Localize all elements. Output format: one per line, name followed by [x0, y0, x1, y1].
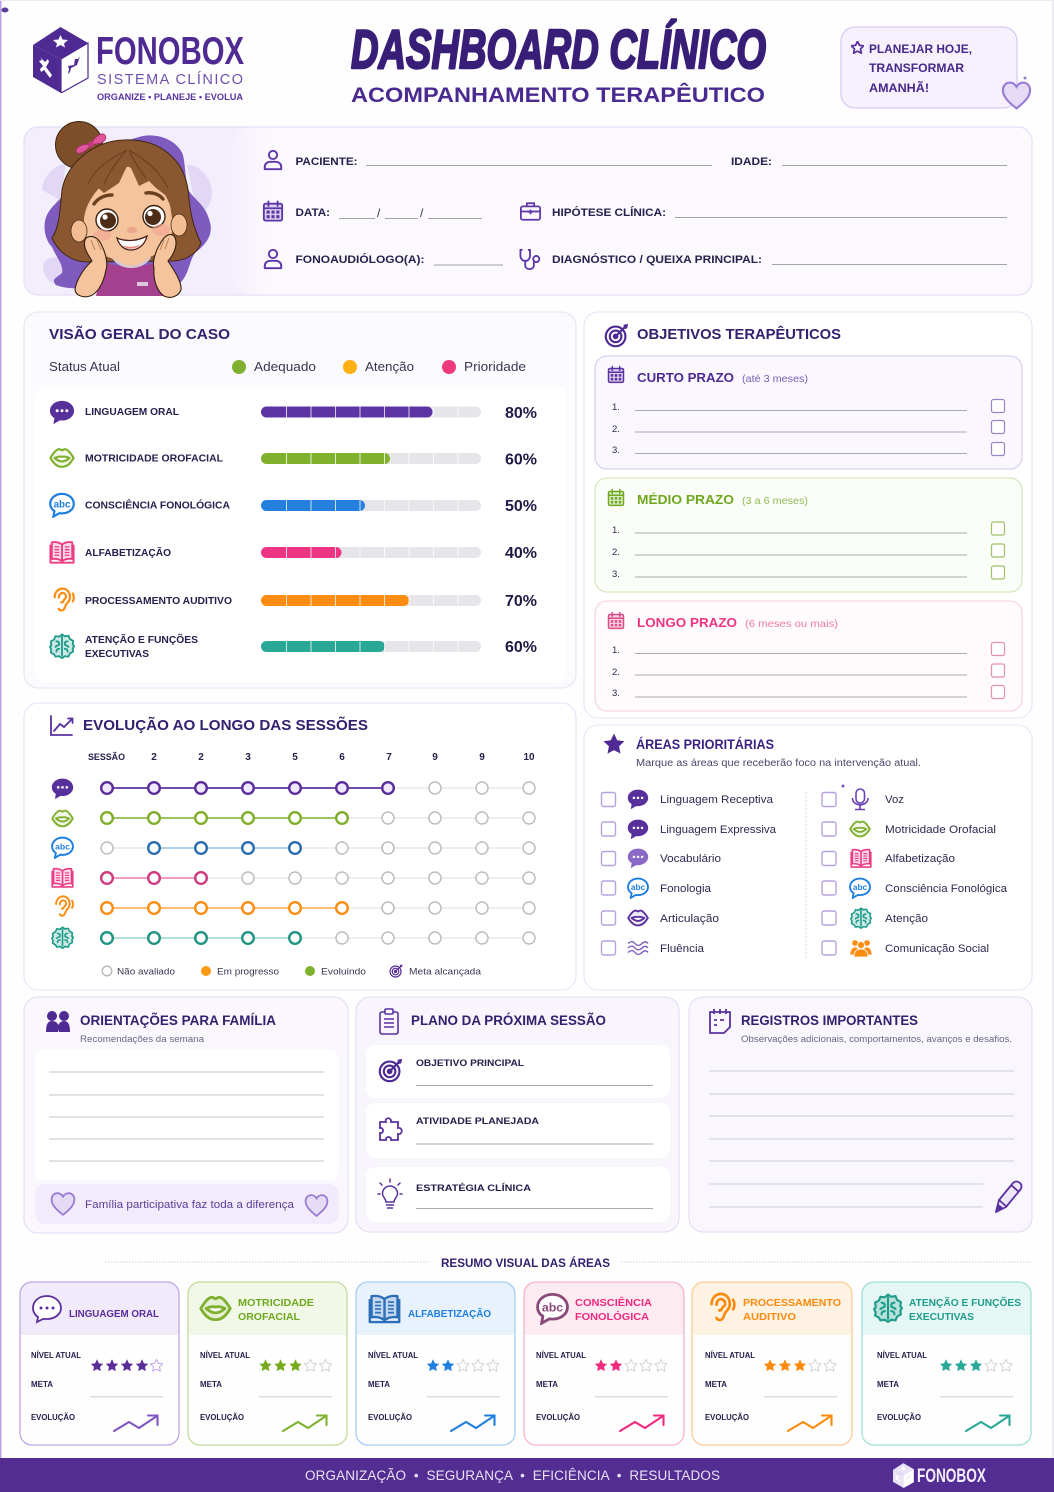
list: right column: Voz [885, 794, 904, 806]
card: motricidade orofacial: EVOLUÇÃO [200, 1413, 244, 1422]
legend: session status: Em progresso [217, 966, 279, 978]
row icons [52, 779, 73, 948]
logo: Fonobox: SISTEMA CLÍNICO [97, 71, 243, 88]
legend: session status: Não avaliado [117, 966, 175, 978]
icon: pencil [996, 1182, 1022, 1212]
session header: 10 [523, 752, 535, 763]
banner: familia participativa: Família participativa faz toda a diferença [85, 1199, 295, 1211]
legend: session status [102, 964, 482, 978]
card: objetivo principal: OBJETIVO PRINCIPAL [416, 1058, 524, 1069]
checkboxes [602, 792, 836, 955]
list: right column: Atenção [885, 913, 928, 925]
logo: Fonobox: ORGANIZE • PLANEJE • EVOLUA [97, 92, 243, 103]
card: processamento auditivo: META [705, 1380, 727, 1389]
field: data: / [420, 206, 424, 220]
panel: visao geral do caso [24, 312, 576, 688]
row: alfabetizacao [50, 542, 537, 563]
card: motricidade orofacial: NÍVEL ATUAL [200, 1351, 250, 1360]
card: linguagem oral: EVOLUÇÃO [31, 1413, 75, 1422]
card: objetivo principal [366, 1045, 670, 1098]
card: processamento auditivo: AUDITIVO [743, 1311, 796, 1323]
panel: areas prioritarias [584, 725, 1032, 990]
session header: SESSÃO [88, 752, 125, 763]
card: medio prazo: (3 a 6 meses) [742, 495, 808, 507]
card: estrategia clinica: ESTRATÉGIA CLÍNICA [416, 1183, 531, 1194]
row: processamento auditivo: PROCESSAMENTO AUDITIVO [85, 595, 232, 607]
panel: orientacoes para familia: Recomendações da semana [80, 1034, 204, 1044]
row: consciencia fonologica: 50% [505, 498, 537, 515]
panel: orientacoes para familia [24, 997, 348, 1233]
card: atencao e funcoes executivas: ATENÇÃO E FUNÇÕES [909, 1296, 1021, 1309]
row: atencao e funcoes executivas: ATENÇÃO E FUNÇÕES [85, 633, 198, 646]
session header: 9 [432, 752, 438, 763]
card: motricidade orofacial: OROFACIAL [238, 1311, 301, 1323]
icon: target [606, 324, 628, 346]
card: longo prazo [595, 601, 1022, 711]
card: atencao e funcoes executivas: META [877, 1380, 899, 1389]
card: alfabetizacao: META [368, 1380, 390, 1389]
field: diagnostico: DIAGNÓSTICO / QUEIXA PRINCIPAL: [552, 253, 762, 266]
panel: patient identification [24, 122, 1032, 297]
list: left column: Vocabulário [660, 853, 721, 865]
card: alfabetizacao [356, 1282, 515, 1445]
row: linguagem oral: LINGUAGEM ORAL [85, 406, 180, 418]
legend: status: Status Atual [49, 360, 120, 374]
card: consciencia fonologica: EVOLUÇÃO [536, 1413, 580, 1422]
session header: 2 [151, 752, 157, 763]
heading: PLANO DA PRÓXIMA SESSÃO [411, 1013, 606, 1028]
card: linguagem oral [20, 1282, 179, 1445]
banner: familia participativa [35, 1184, 339, 1224]
session header: 3 [245, 752, 251, 763]
card: longo prazo: LONGO PRAZO [637, 615, 737, 630]
callout: planejar hoje: TRANSFORMAR [869, 63, 965, 75]
row: atencao e funcoes executivas: 60% [505, 639, 537, 656]
row: atencao e funcoes executivas [50, 633, 537, 660]
card: processamento auditivo: PROCESSAMENTO [743, 1297, 841, 1309]
logo: Fonobox: FONOBOX [96, 30, 244, 73]
legend: status: Prioridade [464, 360, 526, 374]
card: alfabetizacao: EVOLUÇÃO [368, 1413, 412, 1422]
heading: ORIENTAÇÕES PARA FAMÍLIA [80, 1013, 276, 1028]
legend: status [49, 360, 526, 374]
card: longo prazo: 1. [612, 645, 620, 656]
card: consciencia fonologica: CONSCIÊNCIA [575, 1296, 652, 1309]
card: atencao e funcoes executivas [862, 1282, 1031, 1445]
icon: clipboard [380, 1009, 398, 1034]
icon: logo cube [33, 27, 88, 93]
field: hipotese clinica [521, 203, 1007, 220]
session header: 5 [292, 752, 298, 763]
card: consciencia fonologica [524, 1282, 684, 1445]
card: processamento auditivo: NÍVEL ATUAL [705, 1351, 755, 1360]
list: right column: Consciência Fonológica [885, 883, 1008, 895]
icon: family [46, 1011, 70, 1032]
footer [0, 1458, 1054, 1492]
heading: OBJETIVOS TERAPÊUTICOS [637, 325, 841, 343]
session header: 6 [339, 752, 345, 763]
card: consciencia fonologica: FONOLÓGICA [575, 1310, 649, 1323]
field: fonoaudiologo [265, 250, 503, 268]
row: processamento auditivo [55, 589, 537, 610]
list: left column: Linguagem Expressiva [660, 824, 777, 836]
row: motricidade orofacial [50, 449, 537, 468]
card: linguagem oral: META [31, 1380, 53, 1389]
legend: session status: Evoluindo [321, 966, 366, 978]
card: curto prazo: CURTO PRAZO [637, 370, 734, 385]
card: atencao e funcoes executivas: EXECUTIVAS [909, 1311, 974, 1323]
row: consciencia fonologica: CONSCIÊNCIA FONOLÓGICA [85, 498, 230, 512]
card: motricidade orofacial [188, 1282, 347, 1445]
card: processamento auditivo [692, 1282, 852, 1445]
callout: planejar hoje [841, 27, 1030, 108]
session header: 7 [386, 752, 392, 763]
panel: plano da proxima sessao [356, 997, 679, 1232]
card: medio prazo: MÉDIO PRAZO [637, 492, 734, 507]
heading: ÁREAS PRIORITÁRIAS [636, 737, 774, 752]
list: left column [628, 790, 777, 955]
panel: registros importantes [689, 997, 1032, 1232]
card: alfabetizacao: NÍVEL ATUAL [368, 1351, 418, 1360]
icon: footer logo [893, 1463, 914, 1488]
card: motricidade orofacial: META [200, 1380, 222, 1389]
panel: evolucao ao longo das sessoes [24, 703, 576, 990]
card: atividade planejada: ATIVIDADE PLANEJADA [416, 1116, 539, 1127]
row: alfabetizacao: 40% [505, 545, 537, 562]
card: curto prazo: 3. [612, 445, 620, 456]
card: medio prazo: 1. [612, 525, 620, 536]
list: right column: Comunicação Social [885, 943, 989, 955]
field: fonoaudiologo: FONOAUDIÓLOGO(A): [296, 253, 424, 266]
field: idade: IDADE: [731, 156, 772, 168]
section heading: resumo visual das areas: RESUMO VISUAL DAS ÁREAS [441, 1257, 610, 1270]
field: hipotese clinica: HIPÓTESE CLÍNICA: [552, 206, 666, 219]
card: linguagem oral: LINGUAGEM ORAL [69, 1308, 160, 1320]
icon: star [604, 734, 624, 754]
list: right column: Motricidade Orofacial [885, 824, 996, 836]
row: linguagem oral [50, 401, 537, 424]
icon: notepad [710, 1009, 730, 1033]
title: ACOMPANHAMENTO TERAPÊUTICO [351, 83, 765, 107]
card: motricidade orofacial: MOTRICIDADE [238, 1297, 314, 1309]
list: right column: Alfabetização [885, 853, 955, 865]
panel: objetivos terapeuticos [584, 312, 1032, 718]
chart: session timeline [101, 782, 535, 944]
card: consciencia fonologica: NÍVEL ATUAL [536, 1351, 586, 1360]
card: medio prazo: 2. [612, 547, 620, 558]
field: data: DATA: [296, 207, 330, 219]
row: motricidade orofacial: MOTRICIDADE OROFACIAL [85, 452, 224, 464]
title [351, 18, 766, 107]
card: medio prazo: 3. [612, 569, 620, 580]
legend: status: Atenção [365, 360, 414, 374]
legend: session status: Meta alcançada [409, 966, 482, 978]
card: curto prazo [595, 356, 1022, 469]
card: curto prazo: (até 3 meses) [742, 373, 808, 385]
list: left column: Articulação [660, 913, 719, 925]
icon: line chart [51, 716, 72, 735]
heading: VISÃO GERAL DO CASO [49, 325, 230, 343]
card: atencao e funcoes executivas: NÍVEL ATUAL [877, 1351, 927, 1360]
title: DASHBOARD CLÍNICO [351, 18, 766, 80]
panel: areas prioritarias: Marque as áreas que receberão foco na intervenção atual. [636, 758, 921, 769]
field: data: / [377, 206, 381, 220]
row: processamento auditivo: 70% [505, 593, 537, 610]
field: paciente [265, 151, 712, 169]
list: left column: Fluência [660, 943, 705, 955]
session header: 2 [198, 752, 204, 763]
row: atencao e funcoes executivas: EXECUTIVAS [85, 648, 149, 660]
card: curto prazo: 2. [612, 424, 620, 435]
logo: Fonobox [33, 27, 244, 103]
panel: registros importantes: Observações adicionais, comportamentos, avanços e desafios. [741, 1034, 1012, 1044]
card: alfabetizacao: ALFABETIZAÇÃO [408, 1307, 491, 1320]
list: left column: Fonologia [660, 883, 712, 895]
card: longo prazo: 2. [612, 667, 620, 678]
field: diagnostico [520, 250, 1007, 269]
footer: FONOBOX [917, 1466, 986, 1487]
card: atencao e funcoes executivas: EVOLUÇÃO [877, 1413, 921, 1422]
card: longo prazo: 3. [612, 688, 620, 699]
heading: REGISTROS IMPORTANTES [741, 1013, 918, 1028]
row: consciencia fonologica [50, 494, 537, 517]
row: motricidade orofacial: 60% [505, 452, 537, 468]
legend: status: Adequado [254, 360, 316, 374]
field: paciente: PACIENTE: [296, 156, 358, 168]
callout: planejar hoje: PLANEJAR HOJE, [869, 44, 972, 56]
session header [88, 752, 535, 763]
callout: planejar hoje: AMANHÃ! [869, 82, 929, 95]
footer: ORGANIZAÇÃO • SEGURANÇA • EFICIÊNCIA • RESULTADOS [305, 1468, 720, 1483]
card: consciencia fonologica: META [536, 1380, 558, 1389]
card: processamento auditivo: EVOLUÇÃO [705, 1413, 749, 1422]
list: right column [850, 789, 1008, 957]
card: atividade planejada [366, 1103, 670, 1158]
illustration: child [42, 122, 212, 297]
card: estrategia clinica [366, 1167, 670, 1222]
field: data [264, 201, 482, 221]
row: alfabetizacao: ALFABETIZAÇÃO [85, 546, 171, 559]
card: curto prazo: 1. [612, 402, 620, 413]
card: medio prazo [595, 478, 1022, 592]
session header: 9 [479, 752, 485, 763]
row: linguagem oral: 80% [505, 405, 537, 422]
heading: EVOLUÇÃO AO LONGO DAS SESSÕES [83, 716, 368, 734]
card: longo prazo: (6 meses ou mais) [745, 618, 838, 630]
list: left column: Linguagem Receptiva [660, 794, 774, 806]
card: linguagem oral: NÍVEL ATUAL [31, 1351, 81, 1360]
